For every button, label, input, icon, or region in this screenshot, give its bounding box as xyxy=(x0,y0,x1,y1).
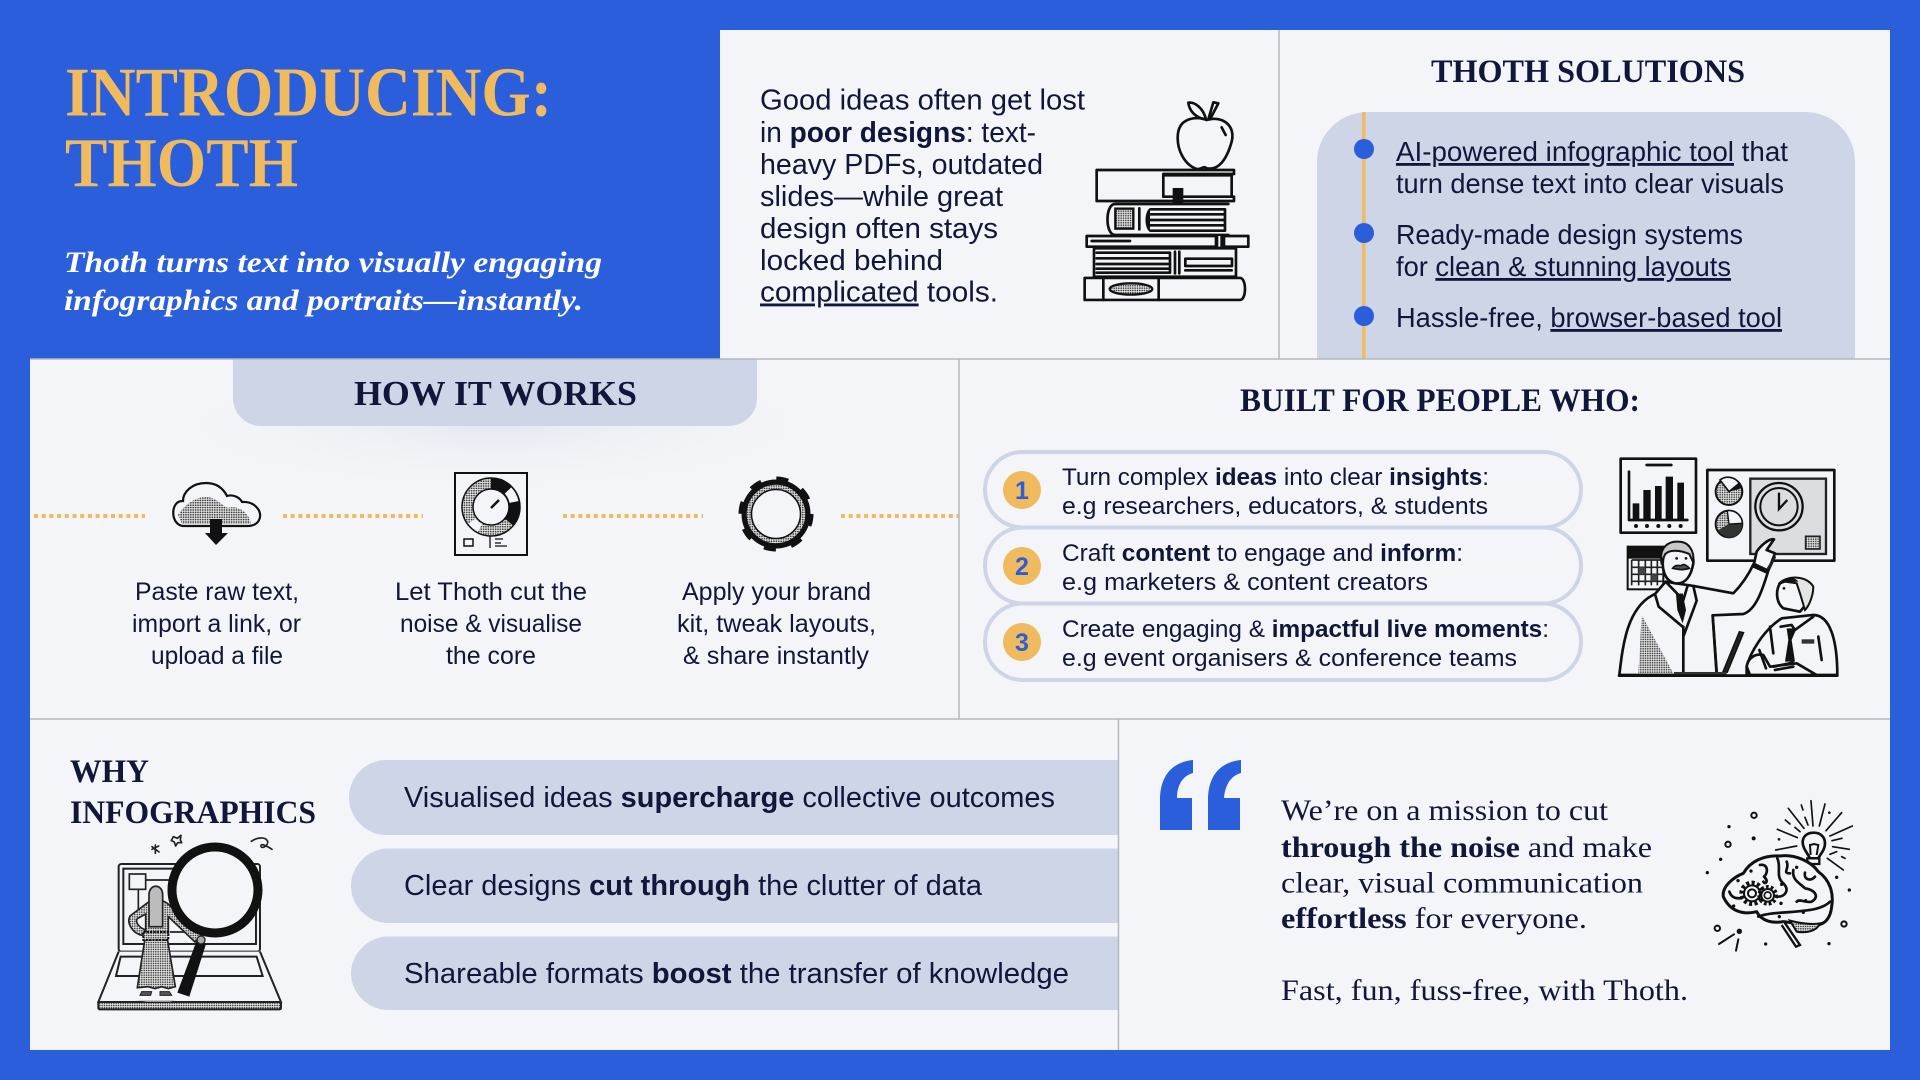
audience row 2: e.g marketers & content creators xyxy=(1062,569,1428,596)
lightbulb xyxy=(1803,833,1825,864)
audience row 1: 1 xyxy=(1015,477,1029,505)
subtitle xyxy=(64,246,602,317)
solutions list: Ready-made design systems xyxy=(1396,219,1743,250)
step 3: & share instantly xyxy=(683,642,869,670)
icon: magnifier over laptop xyxy=(98,835,281,1009)
quote text xyxy=(1281,795,1688,1007)
panel: mission quote xyxy=(1118,719,1890,1050)
particles xyxy=(1706,811,1851,946)
panel: intro header xyxy=(64,54,602,317)
benefit pill 3: Shareable formats boost the transfer of knowledge xyxy=(404,958,1069,990)
woman xyxy=(129,886,202,1002)
dotted connectors xyxy=(34,514,959,518)
solutions list: AI-powered infographic tool that xyxy=(1396,136,1788,167)
audience row 3 xyxy=(985,604,1581,680)
audience row 1 xyxy=(985,452,1581,528)
problem text: design often stays xyxy=(760,213,998,245)
step labels xyxy=(132,578,876,670)
audience row 2: 2 xyxy=(1015,553,1029,581)
benefit pill 1: Visualised ideas supercharge collective outcomes xyxy=(404,782,1055,814)
calendar xyxy=(1628,547,1663,589)
benefit pill 3 xyxy=(351,936,1119,1010)
problem text: Good ideas often get lost xyxy=(760,84,1085,116)
dashboard board xyxy=(1707,470,1834,561)
step 1: import a link, or xyxy=(132,610,301,638)
panel: built for people who xyxy=(959,359,1890,719)
quote text: clear, visual communication xyxy=(1281,868,1643,900)
laptop xyxy=(98,864,281,1009)
audience row 1: Turn complex ideas into clear insights: xyxy=(1062,464,1489,491)
solutions card xyxy=(1317,112,1855,359)
heading tab xyxy=(233,359,757,426)
audience row 1: e.g researchers, educators, & students xyxy=(1062,493,1488,520)
solutions list xyxy=(1396,136,1788,333)
colleague xyxy=(1747,578,1837,675)
quote text: through the noise and make xyxy=(1281,832,1652,864)
solutions list: turn dense text into clear visuals xyxy=(1396,168,1784,199)
problem text: heavy PDFs, outdated xyxy=(760,149,1043,181)
heading: WHY xyxy=(70,754,149,790)
audience row 3: 3 xyxy=(1015,629,1029,657)
step 3 xyxy=(677,578,876,670)
subtitle: Thoth turns text into visually engaging xyxy=(64,246,602,279)
sparkles xyxy=(152,835,272,853)
icon: quotation mark xyxy=(1160,760,1241,830)
title: THOTH xyxy=(65,125,298,202)
heading xyxy=(70,754,316,831)
benefit pill 2: Clear designs cut through the clutter of data xyxy=(404,870,983,902)
laptop and desk xyxy=(1619,632,1837,676)
title xyxy=(65,54,552,202)
panel: why infographics xyxy=(30,719,1119,1050)
heading: INFOGRAPHICS xyxy=(70,795,316,831)
benefit pill 2 xyxy=(351,848,1119,923)
quote text: We’re on a mission to cut xyxy=(1281,795,1609,827)
icon: presenter and colleague xyxy=(1619,459,1837,676)
presenter xyxy=(1619,539,1776,675)
icon: cloud download xyxy=(173,483,260,545)
brain outline xyxy=(1723,856,1832,925)
heading: THOTH SOLUTIONS xyxy=(1431,54,1745,90)
step 3: kit, tweak layouts, xyxy=(677,610,876,638)
step 2 xyxy=(395,578,587,670)
panel: solutions xyxy=(1279,30,1890,359)
panel: problem xyxy=(720,30,1279,359)
solutions list: for clean & stunning layouts xyxy=(1396,251,1731,282)
magnifier xyxy=(172,847,258,997)
heading: BUILT FOR PEOPLE WHO: xyxy=(1240,383,1640,419)
problem text xyxy=(760,84,1085,308)
timeline xyxy=(1354,112,1374,359)
audience row 3: e.g event organisers & conference teams xyxy=(1062,645,1517,672)
problem text: locked behind xyxy=(760,245,943,277)
subtitle: infographics and portraits—instantly. xyxy=(64,284,583,317)
step 3: Apply your brand xyxy=(682,578,871,606)
gears xyxy=(1742,883,1776,904)
problem text: complicated tools. xyxy=(760,276,998,308)
icon: document dial xyxy=(455,473,527,555)
rays xyxy=(1776,801,1852,870)
quote text: effortless for everyone. xyxy=(1281,903,1587,935)
icon: gear ring xyxy=(741,479,811,549)
step 1: upload a file xyxy=(151,642,283,670)
icon: brain with lightbulb xyxy=(1706,801,1852,951)
icon: books and apple xyxy=(1085,102,1248,300)
panel: how it works xyxy=(30,357,959,719)
heading tab: HOW IT WORKS xyxy=(354,374,637,413)
step 1 xyxy=(132,578,301,670)
title: INTRODUCING: xyxy=(65,54,552,132)
bar chart poster xyxy=(1621,459,1696,533)
audience row 3: Create engaging & impactful live moments: xyxy=(1062,616,1549,643)
step 1: Paste raw text, xyxy=(135,578,299,606)
audience row 2 xyxy=(985,528,1581,604)
problem text: in poor designs: text- xyxy=(760,117,1036,149)
solutions list: Hassle-free, browser-based tool xyxy=(1396,302,1782,333)
step 2: noise & visualise xyxy=(400,610,582,638)
quote text: Fast, fun, fuss-free, with Thoth. xyxy=(1281,975,1688,1007)
step 2: the core xyxy=(446,642,536,670)
benefit pill 1 xyxy=(349,760,1119,835)
audience row 2: Craft content to engage and inform: xyxy=(1062,540,1463,567)
problem text: slides—while great xyxy=(760,181,1003,213)
step 2: Let Thoth cut the xyxy=(395,578,587,606)
